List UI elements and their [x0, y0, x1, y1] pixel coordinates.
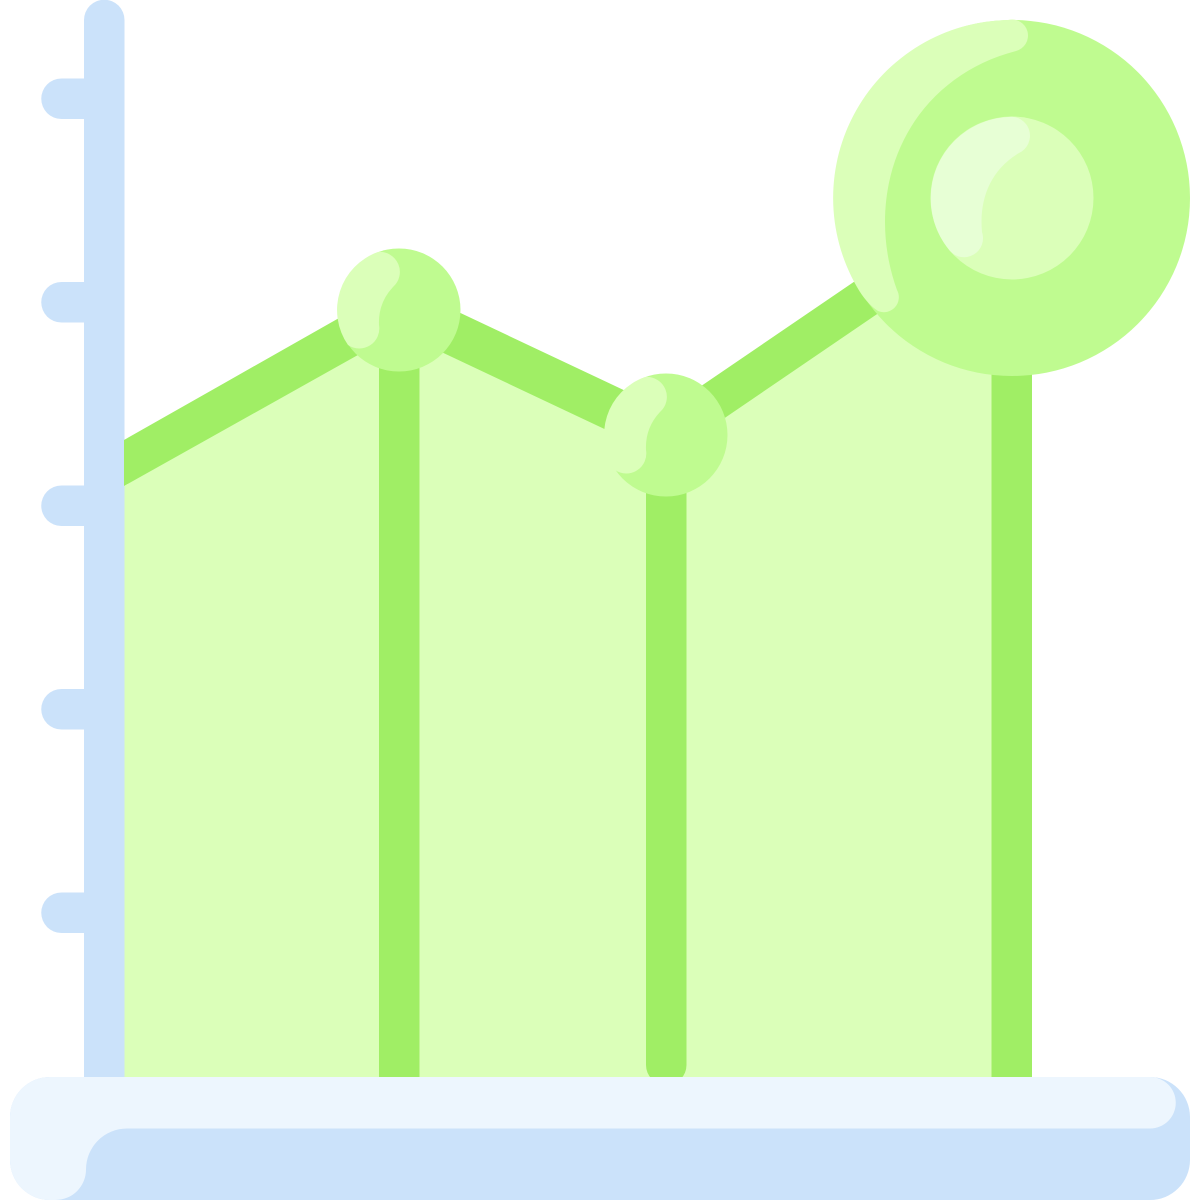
- baseline shelf: [10, 1077, 1190, 1200]
- data point large: [833, 19, 1190, 376]
- data point small middle: [604, 374, 728, 496]
- large point inner circle: [930, 116, 1094, 280]
- shelf highlight: [10, 1077, 1176, 1200]
- trend line: [124, 174, 1012, 486]
- vertical axis with ticks: [41, 0, 125, 1085]
- area under the line: [124, 221, 1012, 1085]
- vertical drop lines: [379, 340, 1032, 1085]
- data point small left: [337, 248, 460, 372]
- inner circle highlight: [931, 117, 1030, 257]
- large point crescent highlight: [833, 19, 1028, 312]
